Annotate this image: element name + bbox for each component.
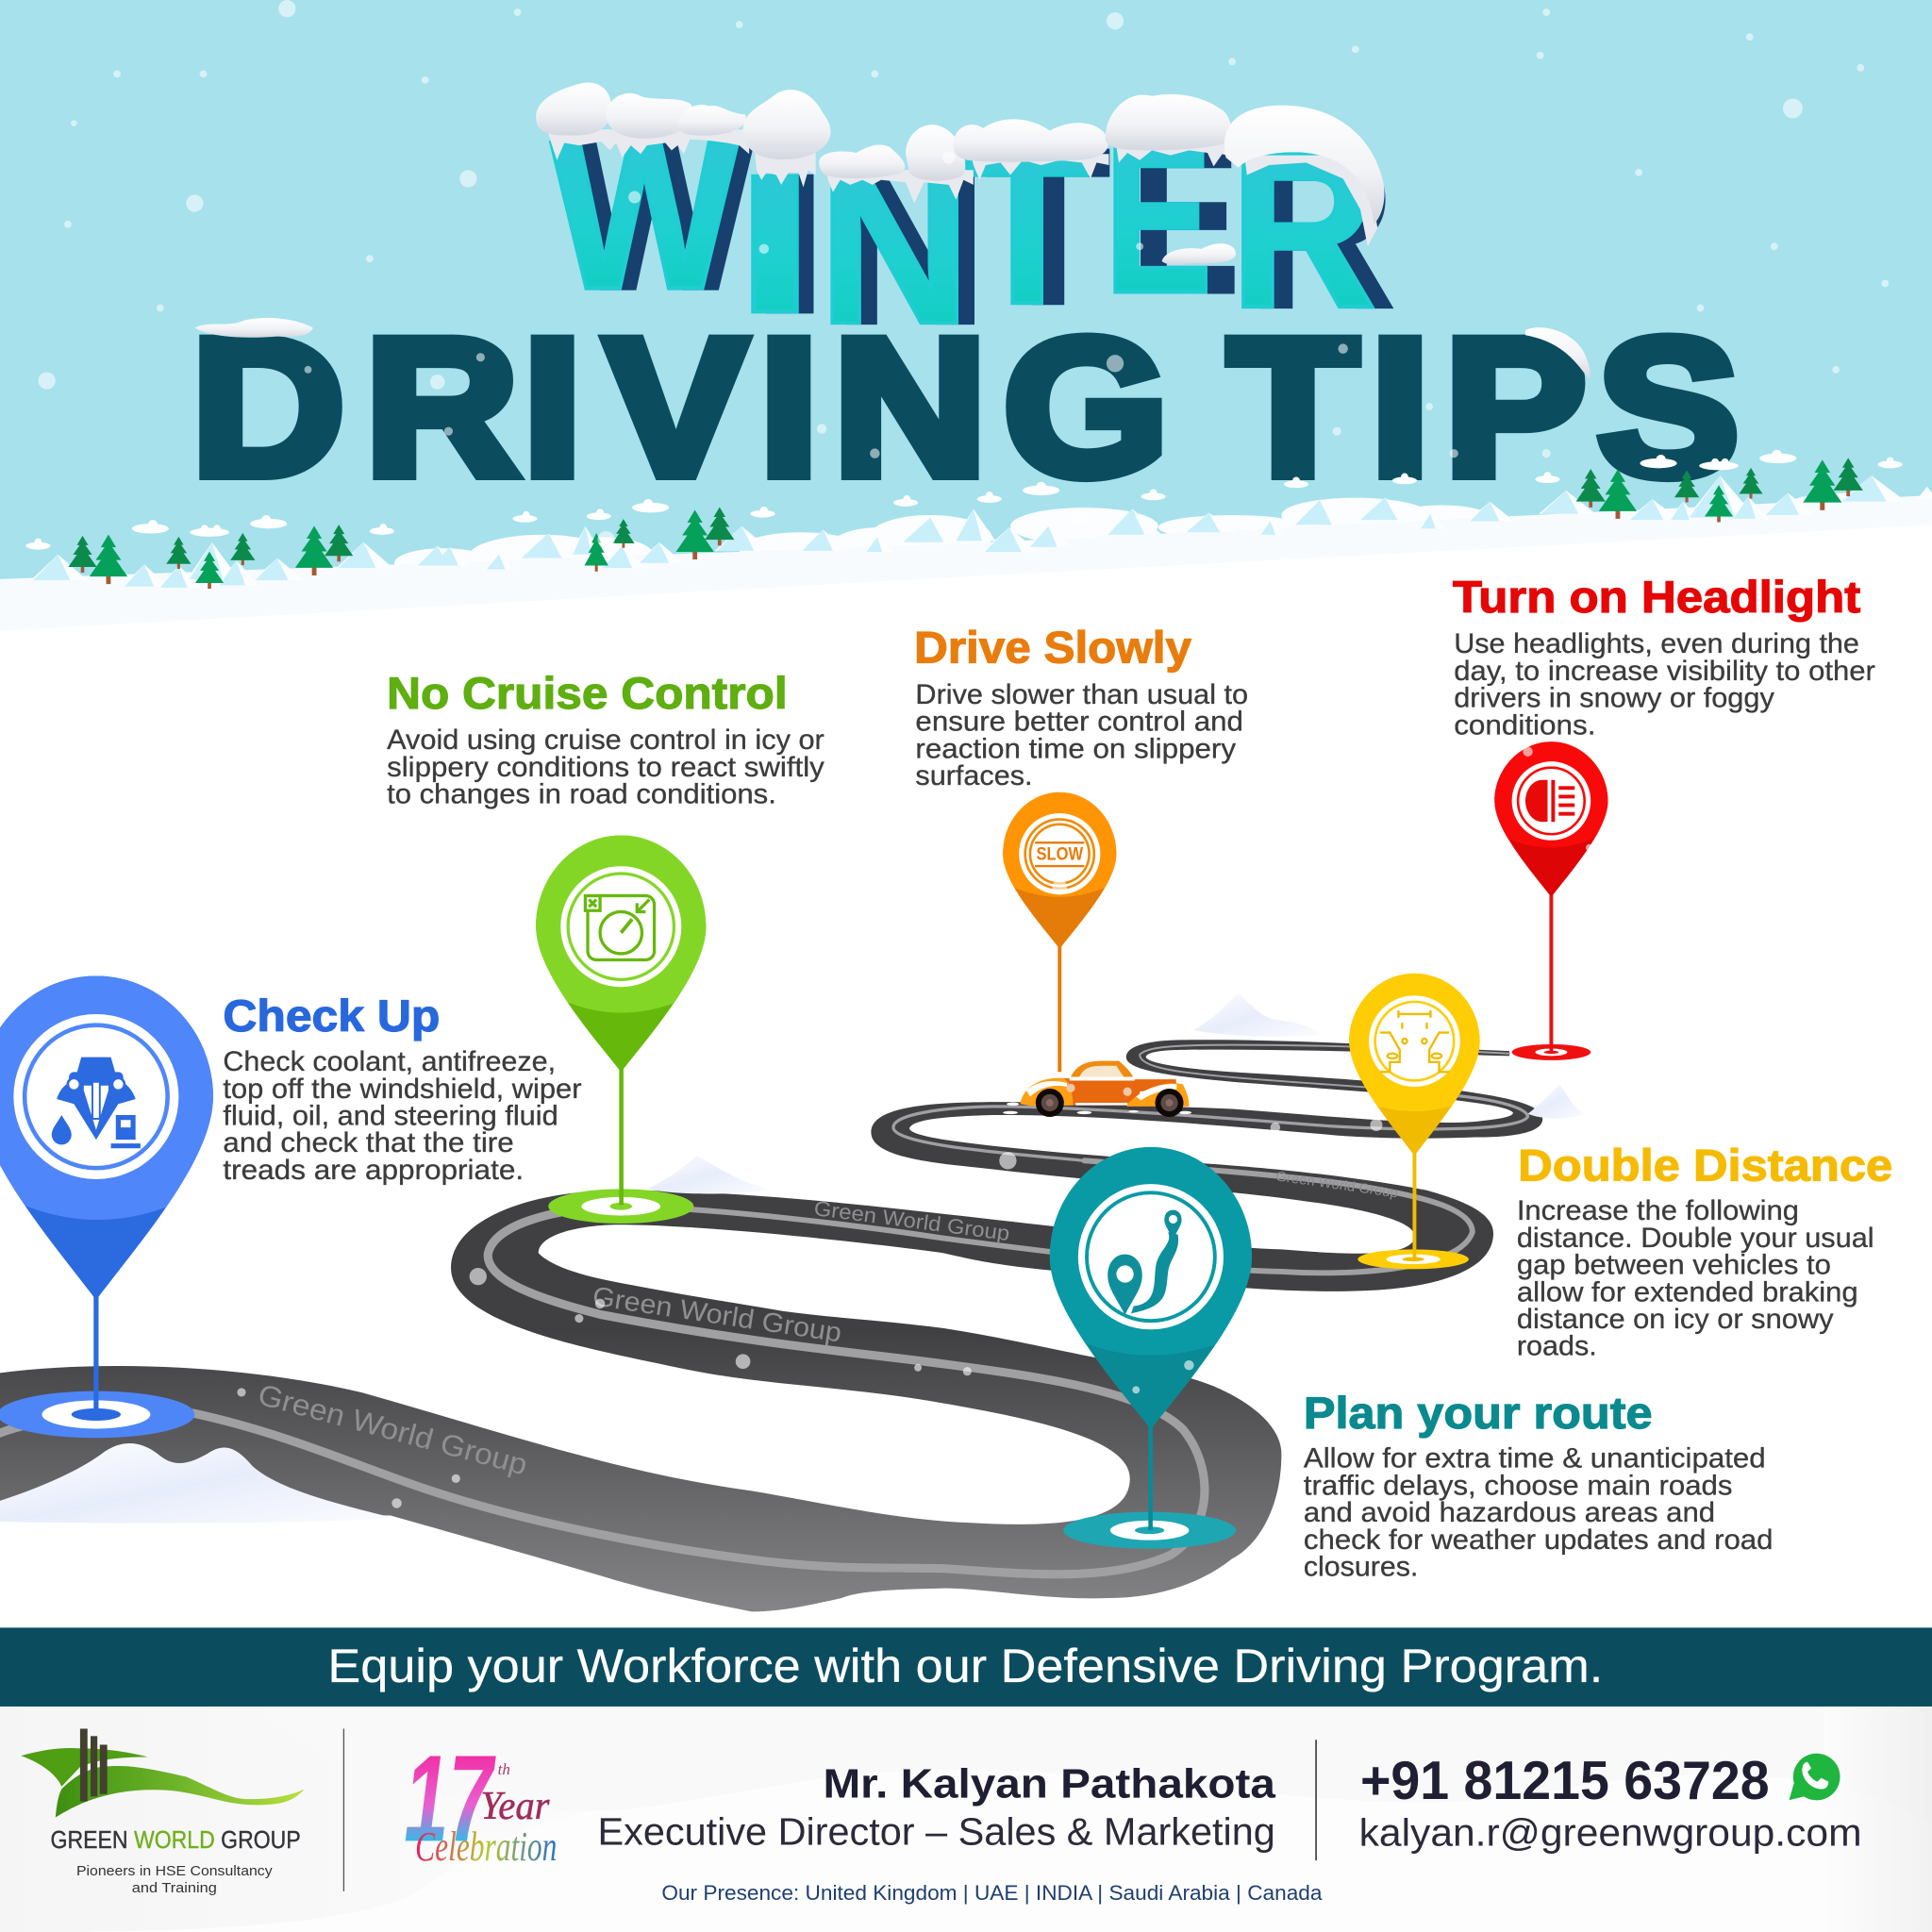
tip: check up	[223, 991, 582, 1186]
icon: whatsapp	[1789, 1754, 1840, 1800]
green pin disc	[560, 866, 681, 987]
yellow stem	[1412, 1151, 1416, 1259]
title letter shadows	[566, 95, 1395, 369]
teal pin body	[1050, 1147, 1252, 1429]
road label: Green World Group, rear: Green World Group	[812, 1196, 1011, 1245]
snow mound: right bend	[1528, 1084, 1585, 1119]
snow mound: rear	[1192, 993, 1321, 1037]
heading: double distance: Double Distance	[1518, 1140, 1892, 1190]
body: double distance: allow for extended braking	[1517, 1276, 1858, 1307]
heading: turn on headlight: Turn on Headlight	[1453, 572, 1861, 622]
logo tagline	[76, 1863, 273, 1896]
icon: engine check	[52, 1058, 141, 1148]
heading: drive slowly: Drive Slowly	[914, 623, 1191, 673]
email: kalyan.r@greenwgroup.com	[1359, 1811, 1862, 1855]
pin: check up, blue	[0, 975, 213, 1438]
pin: no cruise control, green	[536, 836, 706, 1224]
heading: check up: Check Up	[223, 991, 440, 1041]
footer background	[0, 1707, 1932, 1932]
car body	[1052, 1077, 1176, 1106]
body: turn on headlight	[1454, 628, 1875, 741]
snowy hills horizon	[0, 475, 1932, 721]
body: turn on headlight: conditions.	[1454, 709, 1595, 741]
body: double distance: roads.	[1517, 1331, 1597, 1362]
badge: Year: Year	[480, 1785, 550, 1828]
car lamps	[1066, 1084, 1132, 1096]
title: DRIVING TIPS: DRIVING	[192, 298, 1169, 516]
car cabin	[1070, 1061, 1135, 1080]
body: check up: top off the windshield, wiper	[223, 1074, 582, 1105]
badge: 17: 17	[404, 1729, 496, 1867]
snowflakes in sky	[38, 0, 1889, 548]
badge: th: th	[498, 1760, 510, 1778]
green pin body	[536, 836, 706, 1072]
road snow under car	[1003, 1103, 1191, 1114]
pin: turn on headlight, red	[1494, 741, 1607, 1060]
divider: logo	[343, 1728, 344, 1891]
red pin body	[1494, 741, 1607, 897]
presence line: Our Presence: United Kingdom | UAE | INDIA | Saudi Arabia | Canada	[661, 1881, 1323, 1905]
body: turn on headlight: day, to increase visibility to other	[1454, 656, 1875, 687]
red pin top	[1494, 741, 1607, 847]
red stem	[1549, 892, 1553, 1052]
yellow pin top	[1349, 974, 1480, 1111]
title letter faces: I	[734, 134, 816, 354]
car rear wheel	[1155, 1089, 1184, 1117]
snowflakes over road	[175, 747, 1593, 1508]
pine trees	[68, 458, 1863, 589]
blue pin disc	[13, 1014, 178, 1179]
contact name: Mr. Kalyan Pathakota	[823, 1762, 1276, 1807]
title: DRIVING TIPS	[192, 298, 1739, 516]
body: drive slowly: reaction time on slippery	[915, 733, 1236, 764]
tip: no cruise control	[387, 668, 824, 810]
road label: Green World Group, middle: Green World Group	[591, 1281, 843, 1348]
body: check up	[223, 1046, 582, 1186]
red pin disc	[1512, 761, 1591, 841]
car snow	[1026, 1075, 1176, 1106]
body: no cruise control: to changes in road conditions.	[387, 779, 776, 810]
body: turn on headlight: drivers in snowy or foggy	[1454, 683, 1774, 714]
body: double distance: distance on icy or snowy	[1517, 1304, 1834, 1335]
green target	[548, 1189, 693, 1224]
body: check up: fluid, oil, and steering fluid	[223, 1100, 558, 1131]
body: drive slowly: ensure better control and	[915, 707, 1243, 738]
blue pin top	[0, 975, 213, 1220]
body: plan your route: Allow for extra time & unanticipated	[1304, 1443, 1766, 1474]
body: no cruise control: slippery conditions to react swiftly	[387, 752, 824, 783]
body: plan your route: traffic delays, choose main roads	[1304, 1470, 1732, 1501]
winding road	[0, 1040, 1542, 1611]
orange pin top	[1003, 792, 1117, 897]
green pin top	[536, 836, 706, 1013]
car window	[1079, 1066, 1124, 1077]
icon: cruise gauge	[585, 896, 655, 959]
body: check up: and check that the tire	[223, 1127, 514, 1158]
body: no cruise control: Avoid using cruise control in icy or	[387, 724, 824, 756]
contact role: Executive Director – Sales & Marketing	[597, 1809, 1275, 1853]
body: double distance	[1517, 1195, 1874, 1362]
body: turn on headlight: Use headlights, even during the	[1454, 628, 1859, 659]
icon: slow sign: SLOW	[1036, 844, 1084, 865]
heading: plan your route: Plan your route	[1304, 1388, 1653, 1438]
small sky clouds	[25, 450, 1903, 550]
road label: Green World Group, far: Green World Group	[1274, 1169, 1399, 1201]
snow on title letters D and P	[194, 318, 1591, 379]
car	[1003, 1061, 1191, 1117]
body: check up: Check coolant, antifreeze,	[223, 1046, 556, 1077]
title letter faces: R	[1230, 106, 1376, 354]
car front fender	[1020, 1078, 1074, 1107]
car rear fender	[1126, 1083, 1189, 1107]
blue target	[0, 1391, 194, 1438]
body: plan your route: and avoid hazardous areas and	[1304, 1497, 1715, 1528]
icon: headlight	[1525, 780, 1574, 822]
banner	[0, 1627, 1932, 1707]
body: drive slowly: Drive slower than usual to	[915, 679, 1248, 710]
title letter shadows: I	[749, 134, 830, 354]
title: WINTER	[551, 95, 1395, 369]
tip: turn on headlight	[1453, 572, 1875, 741]
car front wheel	[1036, 1089, 1064, 1117]
heading: no cruise control: No Cruise Control	[387, 668, 788, 718]
body: drive slowly	[915, 679, 1248, 791]
title: DRIVING TIPS: TIPS	[1228, 298, 1739, 516]
title letter faces: N	[818, 125, 971, 369]
body: double distance: Increase the following	[1517, 1195, 1799, 1226]
icon: route pins	[1108, 1210, 1182, 1315]
pin: double distance, yellow	[1349, 974, 1480, 1269]
tip: drive slowly	[914, 623, 1248, 791]
body: plan your route: closures.	[1304, 1552, 1418, 1583]
tip: double distance	[1517, 1140, 1892, 1362]
teal pin top	[1049, 1147, 1252, 1355]
logo tagline: and Training	[132, 1880, 217, 1896]
title letter shadows: W	[566, 97, 753, 334]
orange pin body	[1003, 792, 1116, 949]
title letter shadows: R	[1248, 106, 1395, 354]
teal target	[1063, 1512, 1236, 1549]
yellow pin disc	[1369, 995, 1460, 1087]
body: no cruise control	[387, 724, 824, 810]
body: check up: treads are appropriate.	[223, 1155, 524, 1186]
body: plan your route	[1304, 1443, 1774, 1583]
orange stem	[1058, 943, 1061, 1072]
blue pin body	[0, 975, 213, 1300]
banner text: Equip your Workforce with our Defensive Driving Program.	[327, 1640, 1603, 1692]
yellow pin body	[1349, 974, 1480, 1156]
badge: Celebration: Celebration	[415, 1823, 557, 1870]
green stem	[619, 1067, 624, 1205]
pin: drive slowly, orange	[1003, 792, 1116, 1072]
title letter shadows: T	[986, 102, 1110, 350]
divider: contact	[1315, 1740, 1317, 1860]
title letter shadows: E	[1131, 95, 1240, 339]
17th year celebration badge	[404, 1729, 557, 1870]
yellow target	[1357, 1249, 1469, 1269]
teal stem	[1148, 1424, 1153, 1530]
title letter faces: E	[1104, 95, 1212, 339]
logo mark	[21, 1728, 305, 1818]
title letter shadows: N	[834, 125, 987, 369]
body: drive slowly: surfaces.	[915, 760, 1033, 791]
tip: plan your route	[1304, 1388, 1774, 1583]
snow skirts with icicles on WINTER	[547, 129, 1377, 246]
logo tagline: Pioneers in HSE Consultancy	[76, 1863, 273, 1879]
road centre line	[0, 1045, 1528, 1574]
background: winter sky	[0, 0, 1932, 641]
road label: Green World Group, front: Green World Group	[255, 1378, 531, 1481]
title letter faces: W	[551, 97, 738, 334]
icon: two cars distance	[1380, 1010, 1449, 1072]
snow mound: front left	[0, 1443, 394, 1524]
logo: Green World Group	[21, 1728, 305, 1896]
title letter faces: T	[965, 102, 1090, 350]
snow mound: behind green target	[647, 1156, 770, 1193]
red target	[1512, 1044, 1591, 1060]
body: plan your route: check for weather updates and road	[1304, 1524, 1774, 1556]
orange pin disc	[1019, 813, 1100, 894]
snow caps on WINTER	[536, 82, 1385, 264]
body: double distance: gap between vehicles to	[1517, 1250, 1831, 1281]
title letter faces	[551, 95, 1376, 369]
body: double distance: distance. Double your usual	[1517, 1223, 1874, 1254]
phone number: +91 81215 63728	[1360, 1751, 1770, 1811]
logo name: GREEN WORLD GROUP	[51, 1825, 301, 1854]
pin: plan your route, teal	[1050, 1147, 1252, 1549]
teal pin disc	[1078, 1184, 1224, 1329]
blue stem	[93, 1293, 98, 1414]
